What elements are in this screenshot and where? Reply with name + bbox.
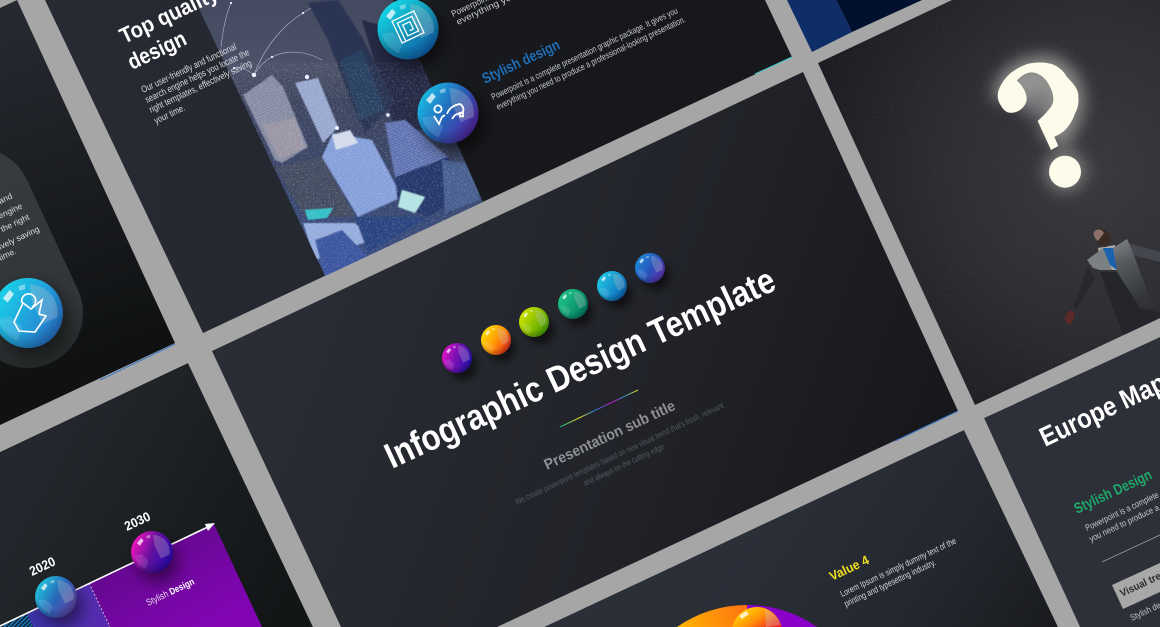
panel: center title slide [212,72,958,627]
grey label box [1112,563,1160,609]
panel: values slide [544,430,1058,627]
panel: timeline slide [0,363,313,627]
subtitle: Presentation sub title [541,397,678,474]
rounded text pill [0,191,41,313]
heading: top quality design: design [123,26,190,75]
year labels [29,512,150,576]
sphere icon: maze [378,0,446,69]
stepped area: purple segment [89,524,262,627]
row of six glossy spheres [442,253,670,380]
stepped area: hatched segment [0,614,33,627]
glow behind question mark [1008,71,1085,191]
description [514,400,725,507]
stepped area: blue-violet segment [27,583,110,627]
sphere on ring [732,607,782,627]
description: and always on the cutting edge. [582,440,667,488]
title: Infographic Design Template [378,259,781,476]
body text: search engine: search engine helps you locate the [144,47,251,106]
segmented ring chart [677,605,817,627]
body text: search engine: right templates, effectively saving [148,58,254,116]
description: We create powerpoint templates based on new visual trend that's fresh, relevant [514,400,725,507]
icon: glowing question mark [998,62,1081,188]
pill body text [0,192,40,260]
rainbow rule [560,390,638,427]
body text: search engine [140,41,254,127]
panel: left dark slide [0,0,175,425]
sphere: 2020 [35,576,82,626]
value body text: Lorem Ipsum is simply dummy text of the [839,536,958,599]
body text: search engine: your time. [153,103,187,127]
figure: businessman looking up [1065,228,1160,335]
year labels: 2020 [27,554,58,579]
sphere icon: two figures [418,82,486,153]
heading: top quality design [115,0,223,75]
panel: europe map slide [984,337,1160,627]
value body text: printing and typesetting industry. [843,557,937,609]
panel: question mark photo slide [810,0,1160,410]
panel: top quality design slide [45,0,792,333]
value heading: Value 4 [827,552,872,584]
photo: night city skyline [190,0,490,280]
body text: search engine: Our user-friendly and functional [140,41,238,96]
sphere: 2030 [131,531,178,582]
segment label: Stylish Design [145,577,196,609]
sphere icon: recycle tile [0,278,70,356]
feature heading: stylish design: Stylish design [479,36,563,88]
timeline arrow [0,523,215,626]
panel: navy slide corner [787,0,922,52]
year labels: 2030 [122,509,153,534]
